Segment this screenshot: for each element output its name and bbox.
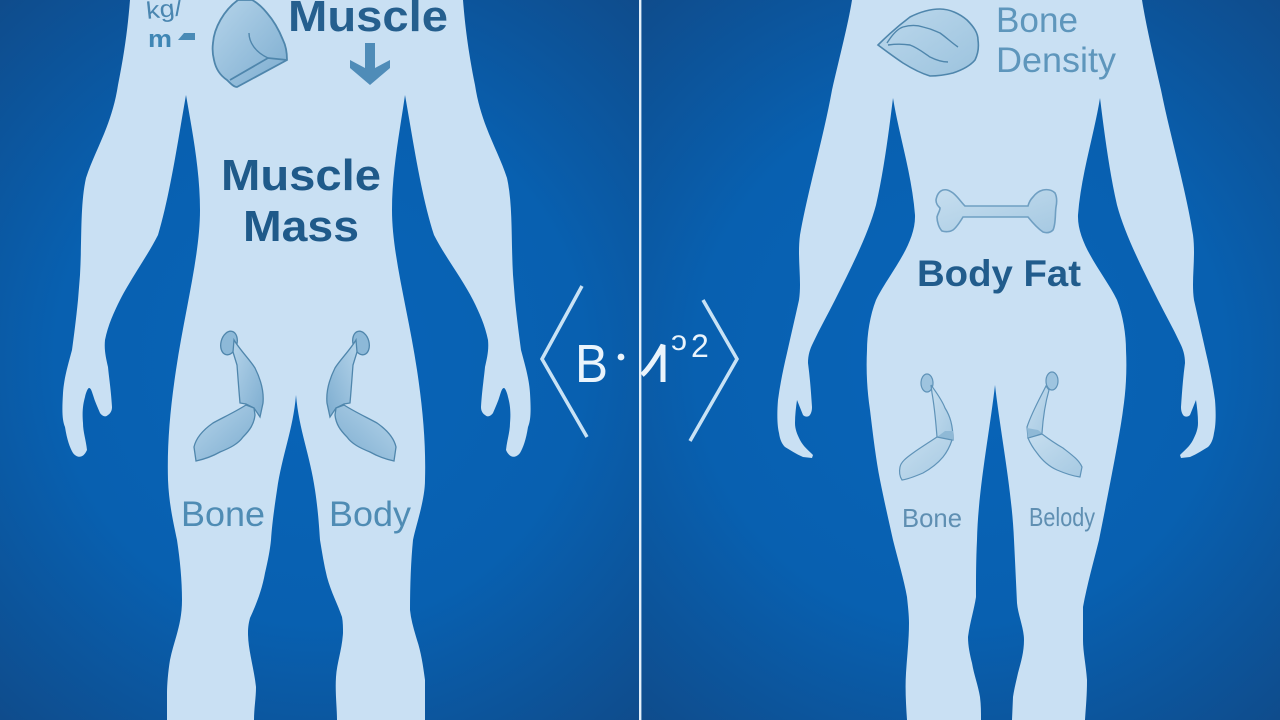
icon: muscle organ (213, 0, 287, 87)
label: Bone: Bone (181, 495, 265, 534)
formula: BMI fragment: 2 (691, 328, 709, 364)
icon: female right bone (1027, 372, 1082, 477)
icon: left chevron (542, 286, 587, 437)
icon: scale units scribble (145, 0, 195, 53)
icon: bone (936, 190, 1057, 233)
icon: left bone (194, 329, 263, 461)
formula: BMI fragment: ɔ (671, 325, 687, 356)
label: Bone (right figure): Bone (902, 503, 962, 533)
icon: down arrow (350, 43, 390, 85)
label: Belody (right figure): Belody (1029, 502, 1095, 532)
silhouette: female body (777, 0, 1216, 720)
formula: BMI fragment: B (575, 334, 608, 394)
label: Bone Density: Bone (996, 1, 1078, 40)
formula: BMI fragment (575, 325, 709, 394)
silhouette: male body (62, 0, 531, 720)
label: Body Fat: Body Fat (917, 253, 1081, 294)
icon: right chevron (690, 300, 737, 441)
divider line (639, 0, 641, 720)
icon: right bone (327, 329, 396, 461)
icon: female left bone (900, 374, 953, 480)
label: Muscle Mass: Mass (243, 202, 359, 251)
icon: scale units scribble: m (148, 26, 172, 53)
icon: leaf-shaped organ (878, 9, 978, 76)
label: Body: Body (329, 495, 412, 534)
label: Bone Density: Density (996, 41, 1117, 80)
background: left panel (0, 0, 640, 720)
label: Muscle Mass: Muscle (221, 151, 381, 200)
background: right panel (640, 0, 1280, 720)
